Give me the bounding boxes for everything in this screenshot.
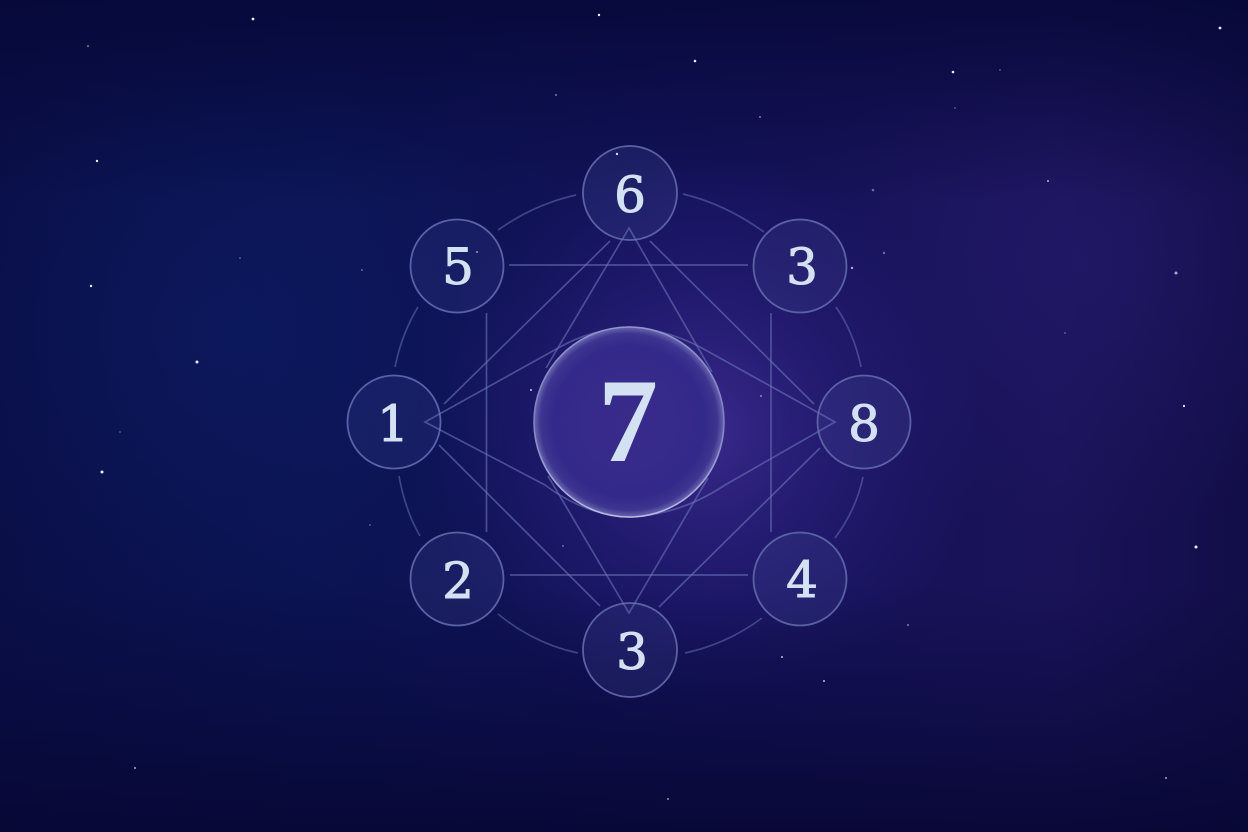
top and bottom apex rhombus — [546, 228, 712, 613]
node 8 — [818, 376, 910, 468]
node 1: 1 — [377, 395, 409, 453]
node 3 upper right — [754, 220, 846, 312]
node 1 — [348, 376, 440, 468]
node 2: 2 — [442, 552, 474, 610]
central circle — [534, 327, 724, 517]
outer ring arcs — [395, 194, 863, 653]
connecting lines — [395, 194, 863, 653]
node 3 bottom — [583, 603, 677, 697]
left and right apex wings — [425, 327, 835, 517]
node 8: 8 — [848, 395, 880, 453]
horizontal lines — [509, 265, 748, 575]
central circle: 7 — [598, 354, 658, 487]
node 3 upper right: 3 — [786, 238, 818, 296]
node 2 — [410, 532, 504, 626]
node 4 — [754, 532, 846, 626]
node 3 bottom: 3 — [616, 623, 648, 681]
node 5: 5 — [442, 238, 474, 296]
node 4: 4 — [786, 551, 818, 609]
vertical lines — [486, 313, 771, 532]
diagonals from side nodes — [439, 241, 820, 607]
node 6: 6 — [614, 166, 646, 224]
node 5 — [410, 220, 504, 312]
node 6 — [583, 146, 677, 240]
